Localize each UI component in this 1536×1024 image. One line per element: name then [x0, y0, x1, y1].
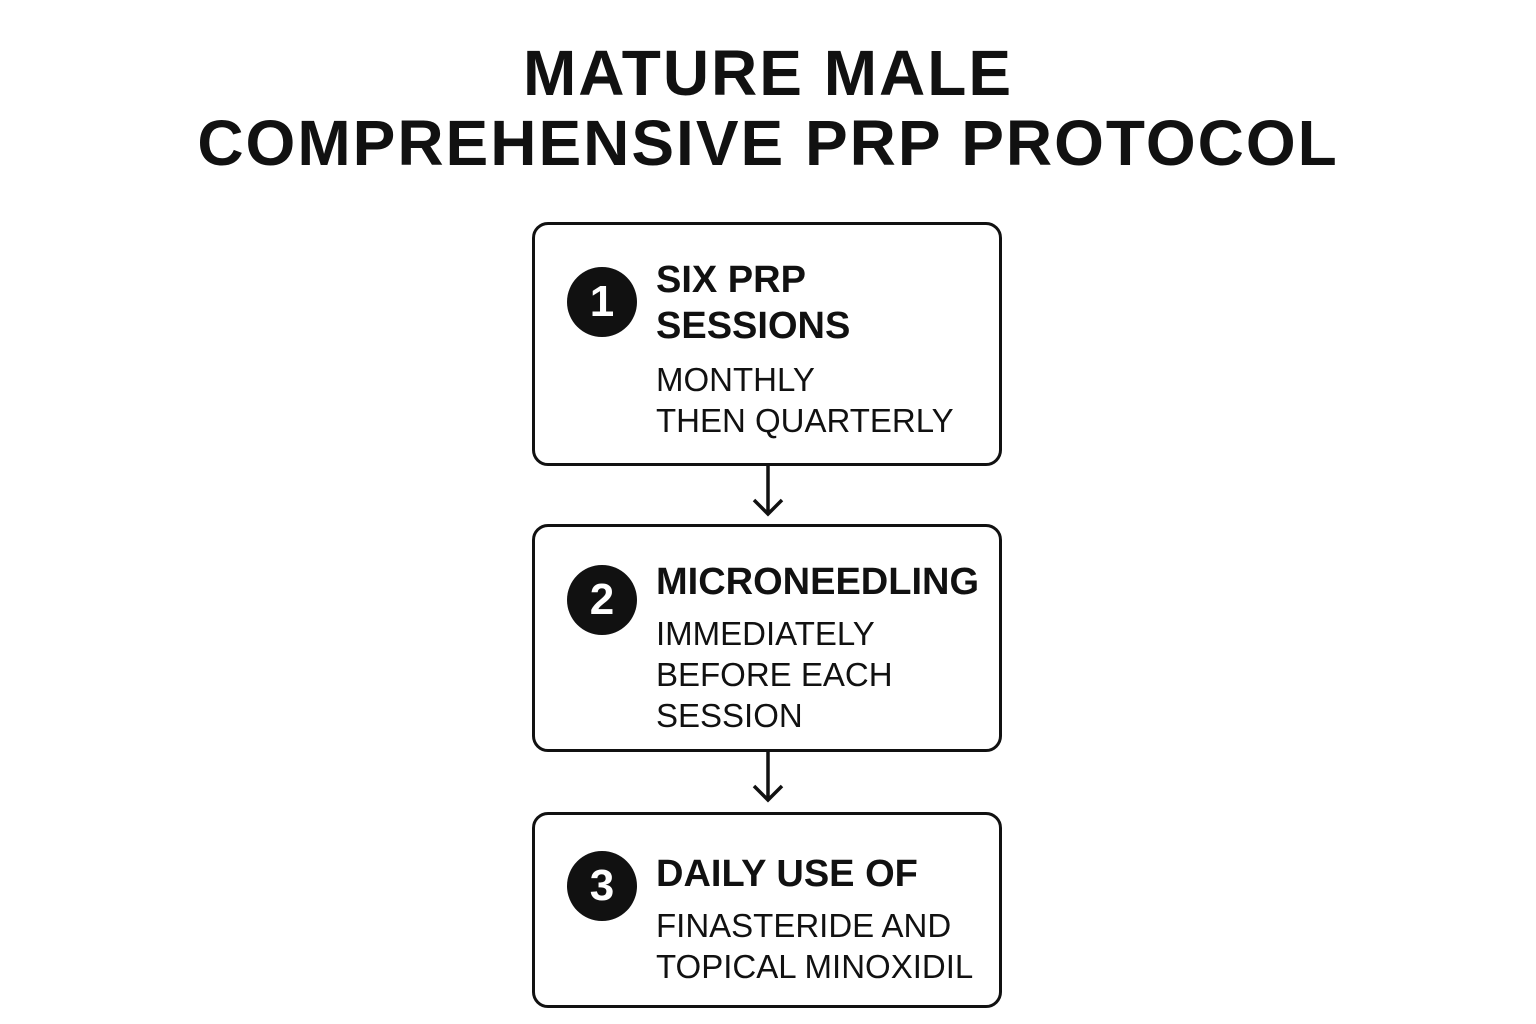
title — [197, 37, 1339, 179]
panel: step 3 — [532, 812, 1002, 1008]
text: step 1: MONTHLY — [656, 361, 815, 398]
panel: step 2 — [532, 524, 1002, 752]
icon: number 1: 1 — [590, 277, 614, 326]
heading: step 1: SIX PRP — [656, 259, 806, 301]
icon: number 2: 2 — [590, 575, 614, 624]
text: step 2: BEFORE EACH — [656, 656, 893, 693]
icon: number 2 — [567, 565, 637, 635]
text: step 1: THEN QUARTERLY — [656, 402, 954, 439]
icon: number 3: 3 — [590, 861, 614, 910]
heading: step 3: DAILY USE OF — [656, 853, 918, 895]
icon: number 1 — [567, 267, 637, 337]
heading: step 1: SESSIONS — [656, 305, 850, 347]
heading: step 1 — [656, 259, 850, 347]
heading: step 2: MICRONEEDLING — [656, 561, 979, 603]
title: COMPREHENSIVE PRP PROTOCOL — [197, 107, 1339, 179]
text: step 3: FINASTERIDE AND — [656, 907, 951, 944]
arrow 2 — [752, 752, 784, 802]
panel: step 1 — [532, 222, 1002, 466]
icon: number 3 — [567, 851, 637, 921]
text: step 3: TOPICAL MINOXIDIL — [656, 948, 973, 985]
text: step 2 — [656, 615, 893, 734]
arrow 1 — [752, 466, 784, 516]
text: step 3 — [656, 907, 973, 985]
title: MATURE MALE — [523, 37, 1013, 109]
text: step 2: IMMEDIATELY — [656, 615, 875, 652]
text: step 1 — [656, 361, 954, 439]
text: step 2: SESSION — [656, 697, 803, 734]
